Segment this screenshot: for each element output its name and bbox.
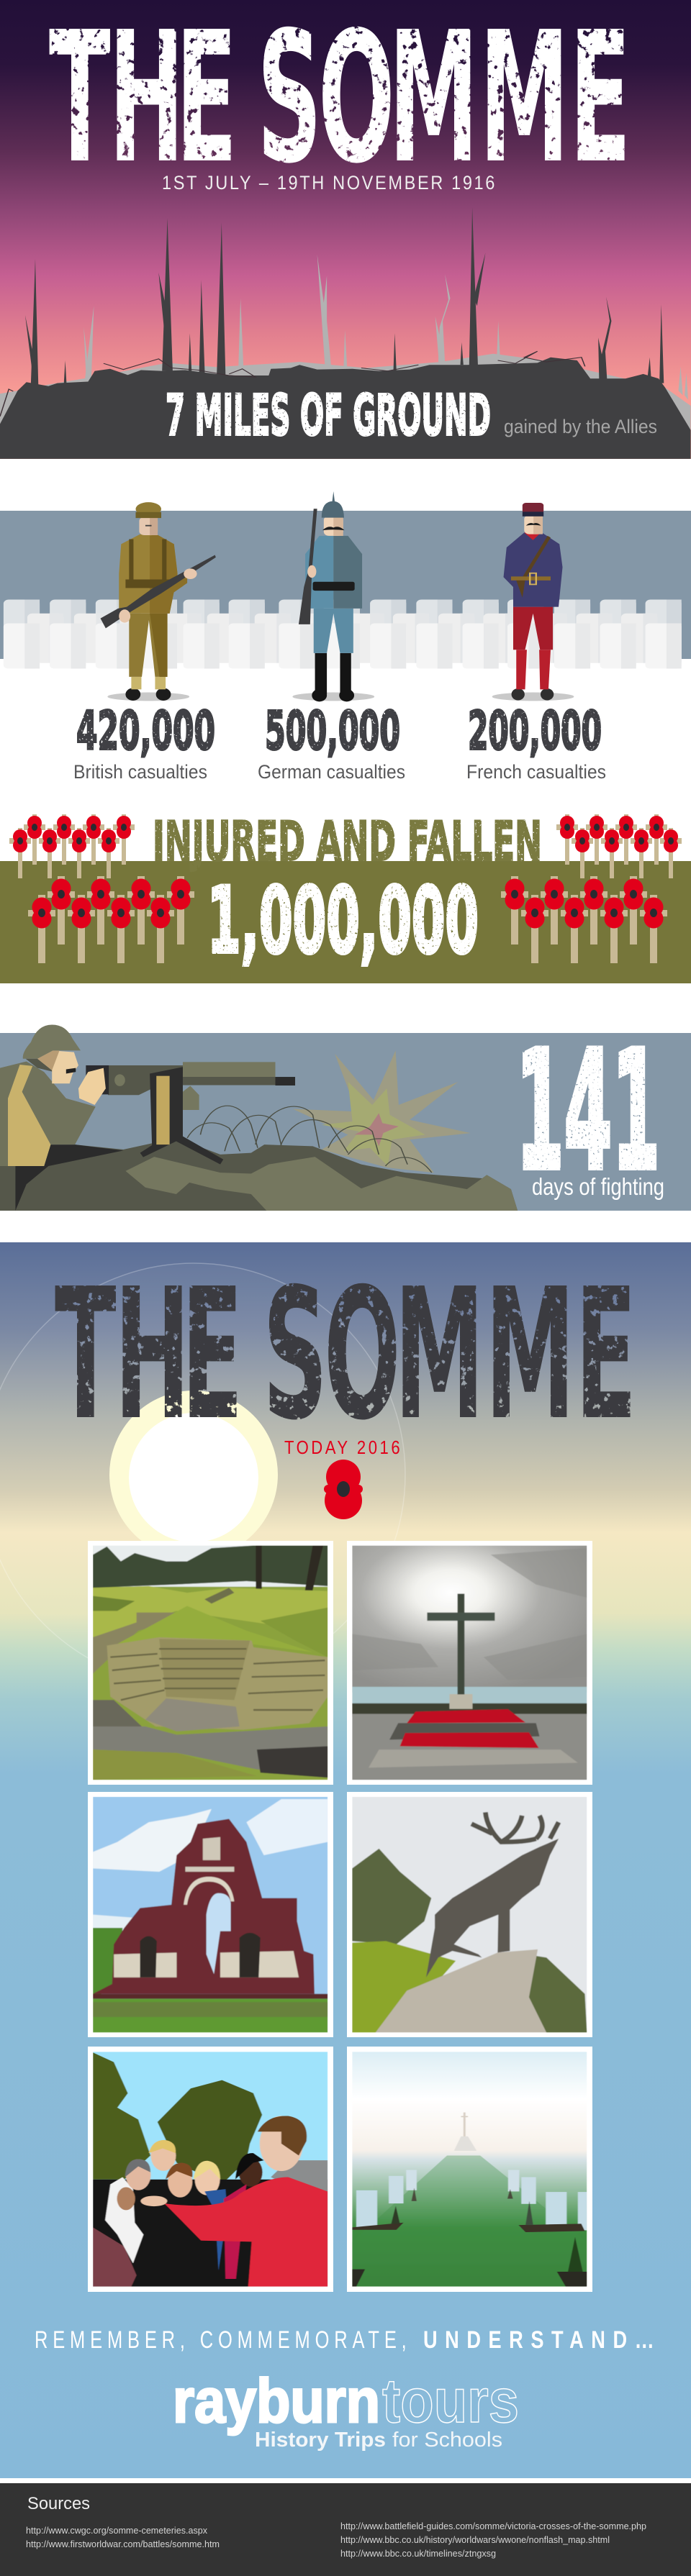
illustration: barbed wire coils: [187, 1106, 432, 1173]
icons: large poppy crosses right: [501, 876, 667, 963]
panel: 141 days of fighting: [0, 1016, 691, 1211]
photo: students with a guide: [88, 2047, 333, 2292]
photo: Newfoundland caribou memorial: [347, 1792, 592, 2037]
illustration: explosion: [293, 1050, 471, 1173]
illustration: dark silhouette of ruined trees and ridge: [0, 207, 691, 459]
background: sky gradient: [0, 1242, 691, 2478]
logo: Rayburn Tours: History Trips: [255, 2429, 386, 2452]
logo: Rayburn Tours: rayburn: [173, 2367, 380, 2436]
subtitle: today 2016: TODAY 2016: [284, 1437, 400, 1458]
figure: German soldier: [292, 491, 374, 701]
illustration: sun and halo: [0, 1263, 405, 1686]
tagline: remember, commemorate, understand: REMEMBER, COMMEMORATE,: [35, 2327, 407, 2354]
panel: soldiers and casualties: [0, 491, 691, 783]
panel: injured and fallen: [0, 809, 691, 983]
stat: German casualties: German casualties: [258, 761, 405, 783]
photo: preserved trench: [88, 1541, 333, 1785]
figure: British soldier: [101, 502, 216, 701]
tagline: remember, commemorate, understand: UNDERSTAND…: [423, 2326, 654, 2354]
text block: sources right column: http://www.battlefield-guides.com/somme/victoria-crosses-of-the-somme.php: [340, 2521, 646, 2531]
illustration: rows of headstones: [4, 600, 682, 668]
illustration: machine gunner: [0, 1025, 106, 1166]
background: slate band: [0, 1033, 691, 1211]
photo: memorial cross with wreaths: [347, 1541, 592, 1785]
text block: sources right column: http://www.bbc.co.uk/timelines/ztngxsg: [340, 2548, 496, 2559]
title: THE SOMME: [55, 1250, 637, 1460]
illustration: grey distant trees and ground: [0, 255, 691, 436]
text block: sources left column: [26, 2525, 220, 2549]
subtitle: dates: 1ST JULY – 19TH NOVEMBER 1916: [162, 172, 497, 194]
photo: misty war cemetery: [347, 2047, 592, 2292]
background: slate band: [0, 511, 691, 659]
panel: the Somme today: [0, 1242, 691, 2478]
caption: gained by the Allies: gained by the Allies: [504, 416, 657, 437]
logo: Rayburn Tours: for Schools: [392, 2429, 502, 2452]
stat: French casualties: [466, 701, 606, 783]
icon: poppy: [324, 1460, 363, 1519]
stat: British casualties: 420,000: [76, 701, 215, 763]
photo: Thiepval memorial: [88, 1792, 333, 2037]
logo: Rayburn Tours: [173, 2367, 519, 2452]
tagline: remember, commemorate, understand: [35, 2326, 654, 2354]
text block: sources right column: http://www.bbc.co.uk/history/worldwars/wwone/nonflash_map.shtml: [340, 2534, 610, 2545]
figure: French soldier: [492, 503, 574, 701]
illustration: machine gun emplacement: [0, 1062, 518, 1211]
panel: dusk battlefield header: [0, 0, 691, 459]
background: olive band: [0, 861, 691, 983]
stat: British casualties: [73, 701, 215, 783]
text block: sources left column: http://www.cwgc.org/somme-cemeteries.aspx: [26, 2525, 207, 2536]
heading: sources: Sources: [27, 2494, 90, 2513]
stat: British casualties: British casualties: [73, 761, 207, 783]
logo: Rayburn Tours: tours: [382, 2367, 519, 2436]
text block: sources left column: http://www.firstworldwar.com/battles/somme.htm: [26, 2539, 220, 2549]
illustration: barbed wire on the ridge: [0, 351, 585, 417]
caption: days of fighting: days of fighting: [532, 1173, 664, 1200]
stat: German casualties: [258, 701, 405, 783]
icons: small poppy crosses right: [556, 814, 682, 878]
text block: sources right column: [340, 2521, 646, 2559]
stat: German casualties: 500,000: [265, 701, 400, 763]
panel: sources footer: [0, 2483, 691, 2576]
stat: French casualties: French casualties: [466, 761, 606, 783]
icons: large poppy crosses left: [28, 876, 194, 963]
icons: small poppy crosses left: [9, 814, 135, 878]
